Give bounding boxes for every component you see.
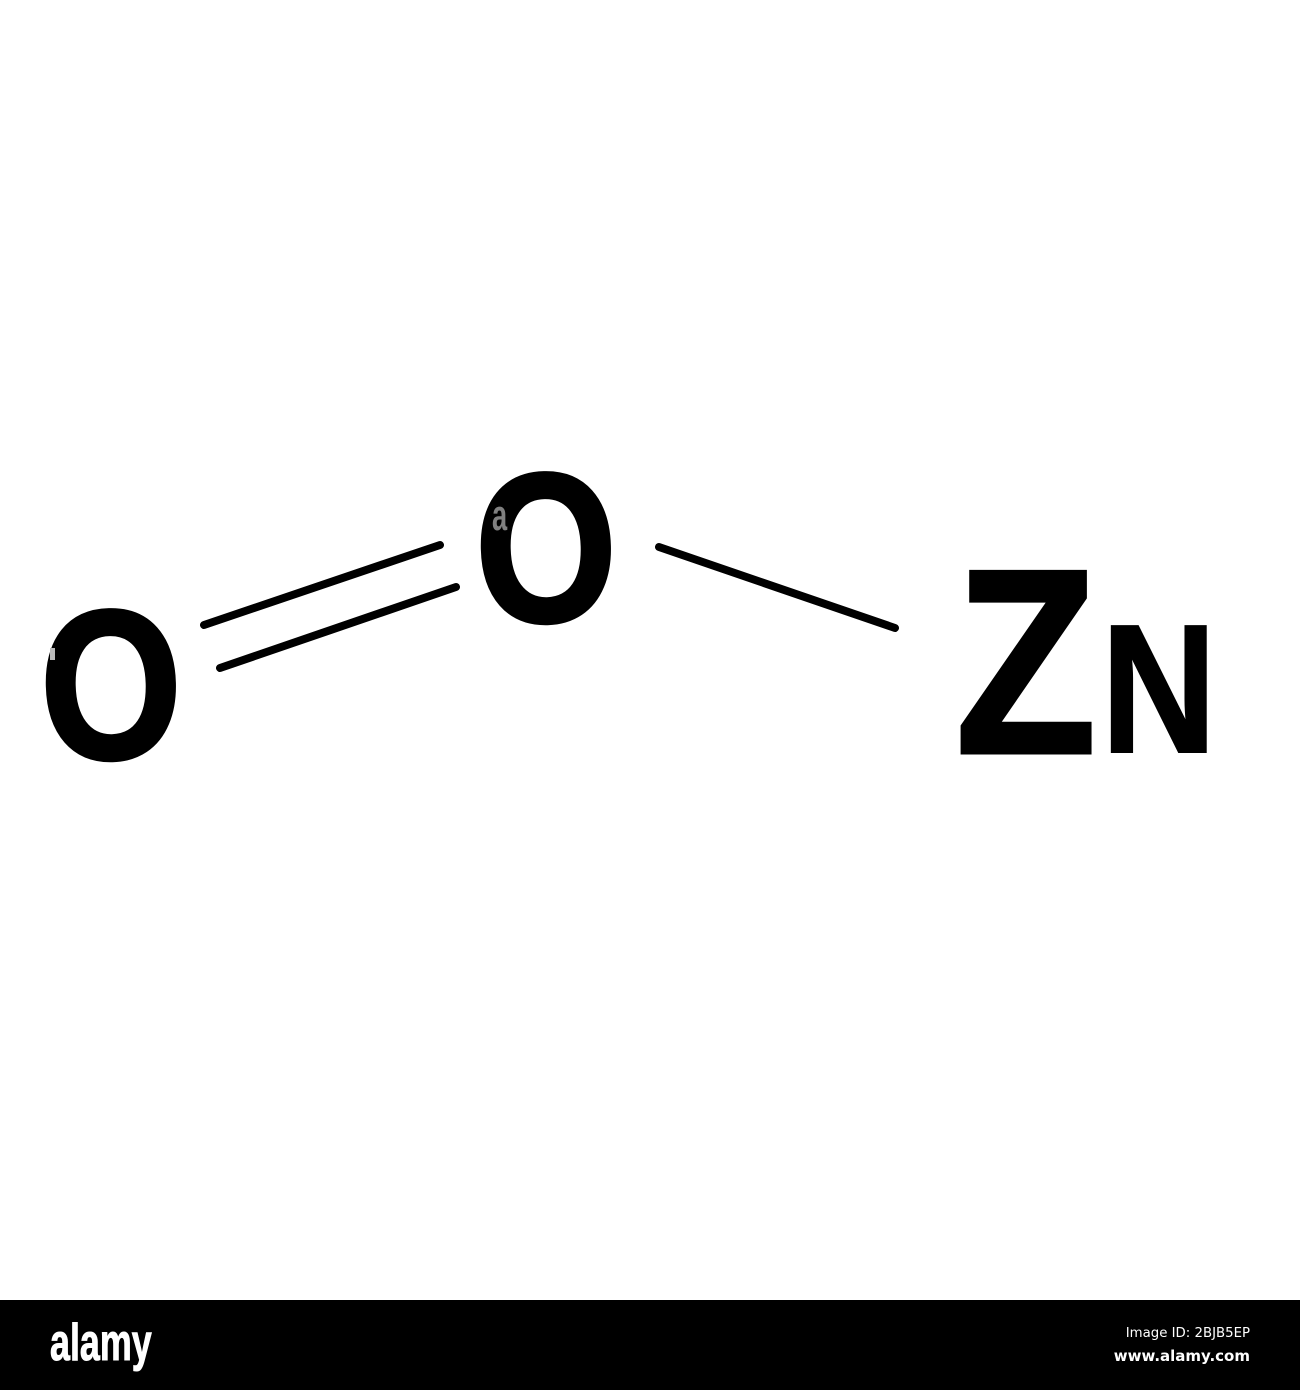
footer website: www.alamy.com bbox=[1114, 1347, 1250, 1365]
letter Z: Z bbox=[955, 514, 1097, 809]
double bond between oxygens bbox=[204, 545, 456, 668]
watermark letter on central oxygen: a bbox=[492, 490, 508, 540]
footer bar bbox=[0, 1300, 1300, 1390]
atom label: zinc bbox=[955, 514, 1217, 809]
watermark fragment on left oxygen bbox=[50, 648, 55, 660]
footer logo: alamy: alamy bbox=[50, 1315, 152, 1372]
single bond from oxygen to zinc bbox=[659, 547, 895, 628]
footer image id: Image ID: 2BJB5EP bbox=[1126, 1326, 1250, 1341]
letter N: N bbox=[1101, 587, 1217, 791]
atom: central oxygen: O bbox=[472, 427, 620, 668]
atom: left oxygen: O bbox=[37, 564, 185, 805]
